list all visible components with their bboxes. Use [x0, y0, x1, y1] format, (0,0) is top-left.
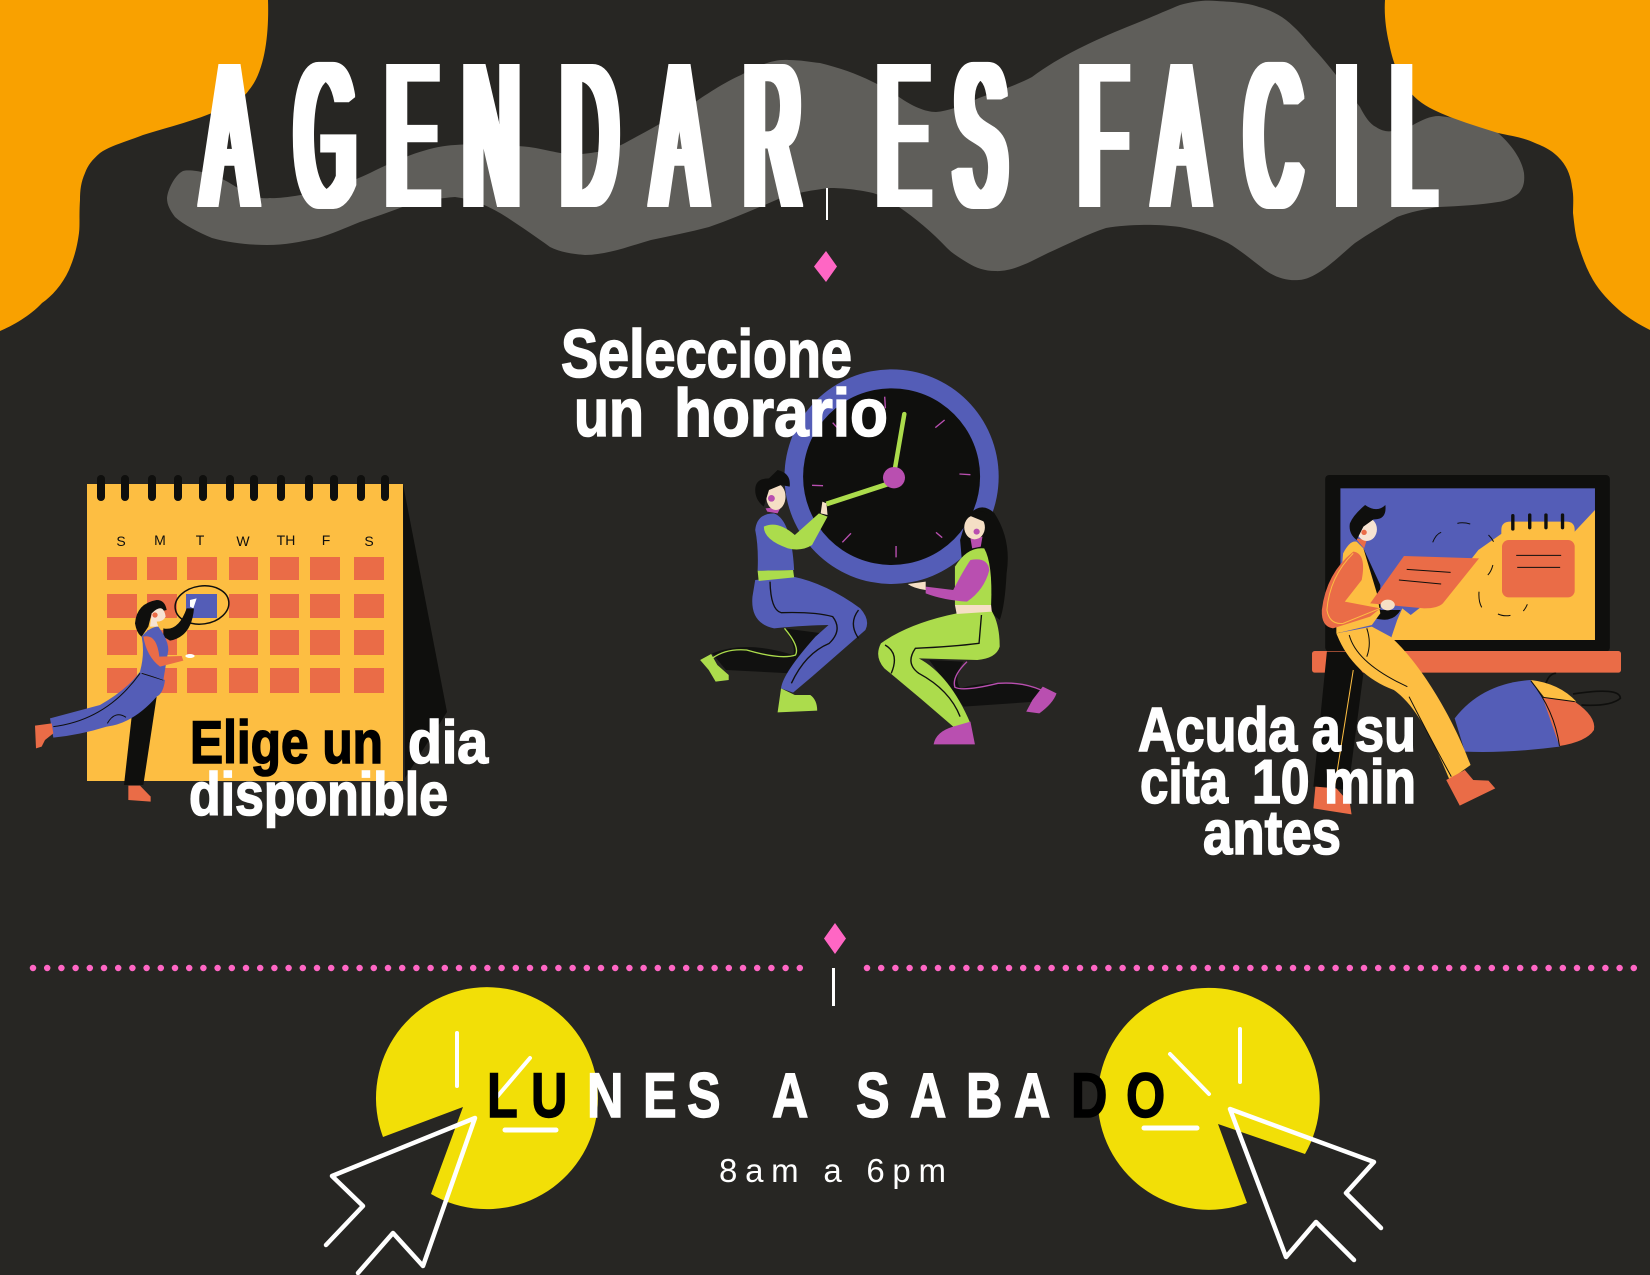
circled mark [173, 582, 231, 628]
illustration: calendar with woman [35, 475, 447, 802]
man figure [1313, 505, 1495, 814]
heading: seleccione un horario: horario [674, 375, 888, 451]
weekday letters: TH [277, 532, 295, 548]
illustration: man with monitor and mouse [1312, 475, 1621, 814]
top connector line [826, 188, 828, 220]
desk [1312, 651, 1621, 673]
orange corner blob left [0, 0, 268, 331]
schedule days: DO [1071, 1061, 1165, 1131]
heading: elige un dia: disponible [189, 761, 448, 828]
cursor icon right [1144, 1029, 1381, 1260]
weekday letters: W [236, 533, 250, 549]
bottom pink diamond [824, 923, 846, 954]
clock ticks [812, 397, 970, 557]
clock face [784, 369, 999, 584]
right person [878, 507, 1057, 744]
heading: seleccione un horario: un [574, 375, 644, 451]
schedule hours: 8am a 6pm [719, 1152, 946, 1189]
heading: acuda a su cita 10 min antes [1138, 696, 1416, 868]
weekday letters: F [322, 532, 330, 548]
heading: seleccione un horario: Seleccione [561, 316, 852, 392]
calendar rings [97, 475, 389, 501]
dotted divider left [33, 965, 800, 971]
clock hands [895, 414, 904, 470]
cursor icon left [326, 1033, 556, 1273]
computer mouse [1455, 673, 1620, 752]
title: AGENDAR ES FACIL [204, 20, 1434, 250]
monitor [1325, 475, 1610, 652]
illustration: clock with two people [700, 369, 1057, 744]
weekday letters: T [196, 532, 205, 548]
woman figure [35, 598, 197, 802]
heading: seleccione un horario [561, 316, 888, 451]
heading: acuda a su cita 10 min antes: cita [1140, 748, 1228, 817]
selected day [186, 594, 217, 618]
heading: elige un dia: dia [408, 709, 489, 776]
yellow pie circle left [376, 987, 598, 1209]
schedule days: LU [487, 1061, 567, 1131]
heading: acuda a su cita 10 min antes: 10 min [1252, 748, 1416, 817]
yellow pie circle right [1098, 988, 1320, 1210]
calendar page [87, 484, 403, 781]
weekday letters: S [116, 533, 126, 549]
weekday letters: M [154, 532, 166, 548]
screen calendar icon [1433, 515, 1575, 616]
weekday letters: S [364, 533, 374, 549]
weekday letters [116, 532, 374, 549]
heading: elige un dia: Elige un [190, 709, 383, 776]
heading: acuda a su cita 10 min antes: Acuda a su [1138, 696, 1416, 765]
left person [700, 470, 867, 712]
heading: acuda a su cita 10 min antes: antes [1203, 799, 1341, 868]
heading: elige un dia [189, 709, 489, 828]
schedule days: NES A SABA [587, 1061, 1050, 1131]
top pink diamond [814, 251, 837, 282]
gray wavy blob behind title [167, 1, 1524, 280]
bottom connector line [832, 968, 835, 1006]
orange corner blob right [1385, 0, 1650, 330]
calendar shadow [403, 484, 447, 778]
monitor hill [1390, 510, 1595, 640]
dotted divider right [867, 965, 1640, 971]
day cells [107, 557, 384, 693]
